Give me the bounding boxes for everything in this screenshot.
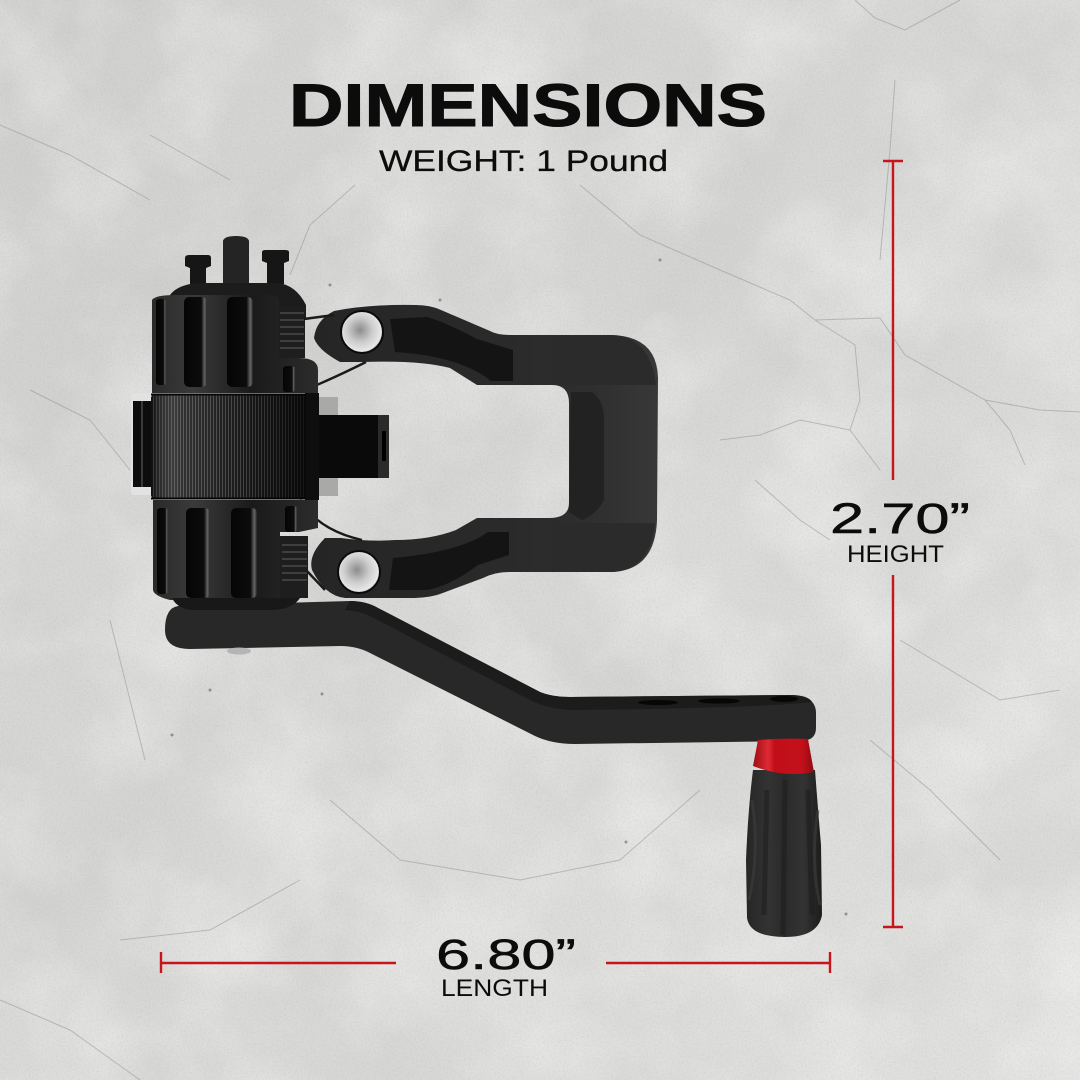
lower spring coil [280,536,308,598]
top spring coil [279,306,305,358]
height arrow line [883,161,903,927]
lower ring [172,598,300,610]
lower cable [300,500,362,590]
U bracket [311,305,658,598]
red handle collar [753,739,814,774]
height dimension [830,161,970,927]
top cable [300,315,366,392]
product: handle and spool assembly [131,236,822,937]
upper silver ball [341,311,383,353]
left clip [131,393,153,495]
handle grip [746,770,822,937]
spool assembly [131,236,389,610]
weight subtitle: WEIGHT: 1 Pound [379,145,668,178]
square mount [318,397,389,496]
title: DIMENSIONS [289,72,767,139]
top cap [170,283,306,320]
lower knurled cylinder [153,500,318,600]
lower silver ball [338,551,380,593]
knurled center band [151,394,306,498]
length value: 6.80” [436,931,576,979]
lower arm recess [389,532,509,590]
upper arm recess [390,317,513,381]
height value: 2.70” [830,495,970,543]
length dimension [161,931,830,1002]
height label: HEIGHT [847,541,944,568]
top knurled cylinder [152,295,318,393]
pins [185,236,289,284]
crank arm [165,601,816,744]
right plate [305,393,319,500]
length arrow line [161,952,830,973]
length label: LENGTH [441,975,548,1002]
